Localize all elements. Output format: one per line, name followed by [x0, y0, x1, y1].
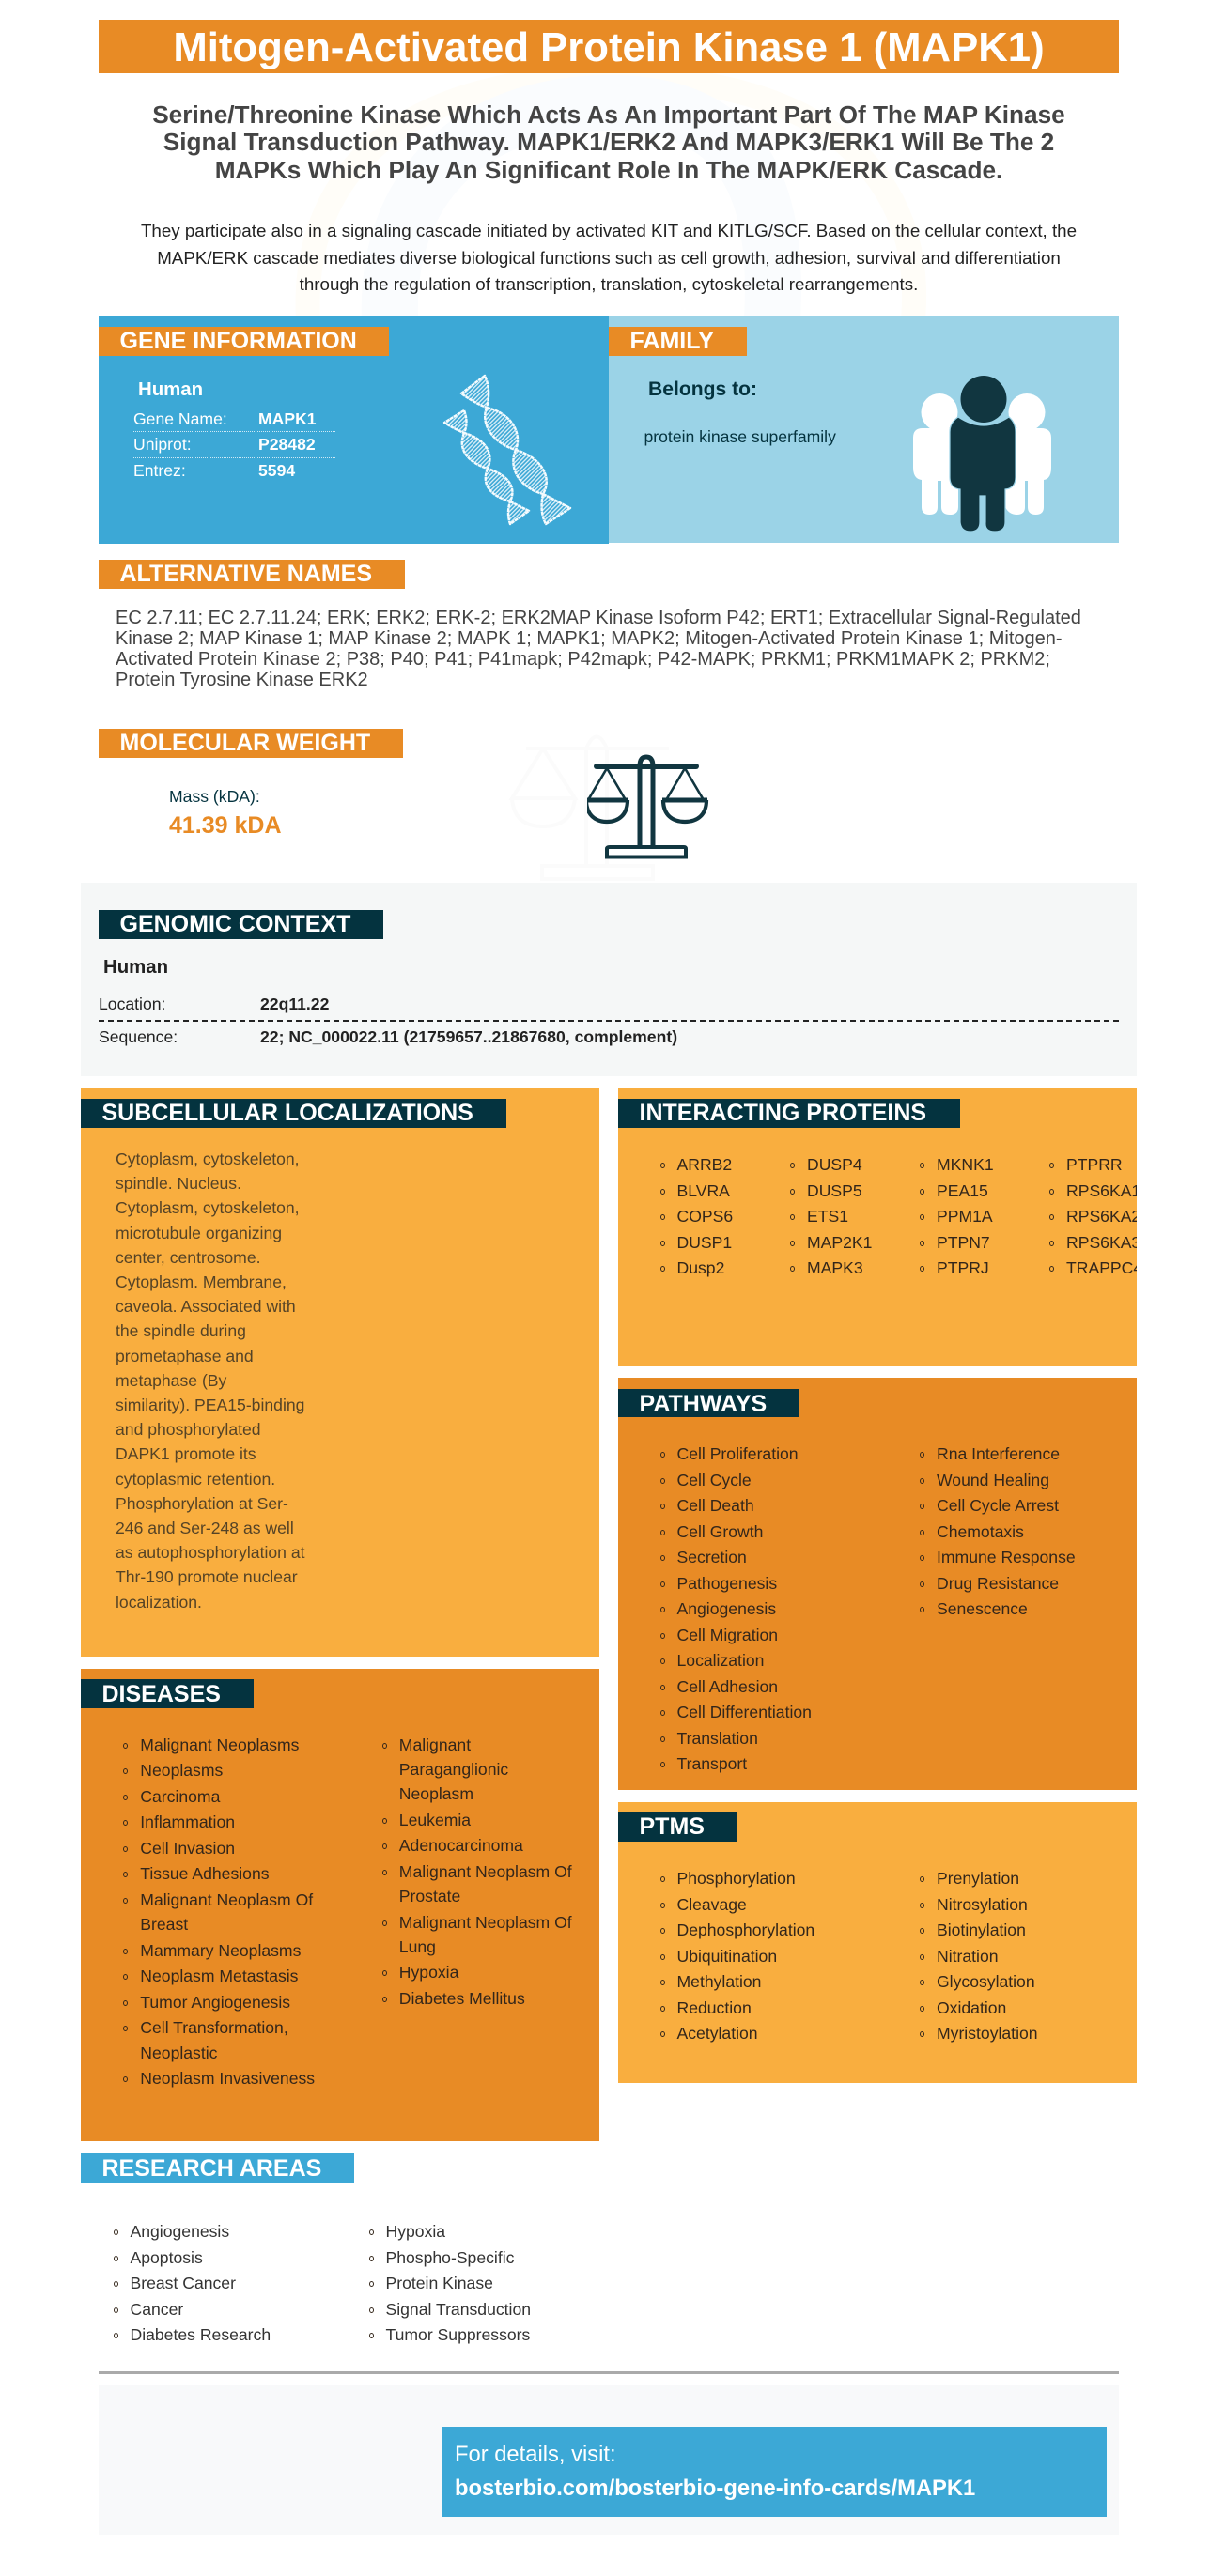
PTM list: Nitrosylation — [937, 1895, 1028, 1914]
heading: diseases: DISEASES — [101, 1681, 221, 1707]
background watermark logo — [282, 73, 939, 319]
disease list: Cell Transformation, — [140, 2018, 288, 2037]
pathway list: Cell Migration — [676, 1625, 778, 1643]
disease list: Malignant — [399, 1735, 471, 1754]
gene info table: Human — [138, 379, 203, 400]
PTM list: Acetylation — [676, 2024, 758, 2043]
protein list — [660, 1155, 1137, 1277]
research areas list: Diabetes Research — [130, 2325, 271, 2344]
pathway list: Immune Response — [937, 1548, 1076, 1566]
disease list: Lung — [399, 1937, 436, 1956]
protein list: COPS6 — [676, 1207, 733, 1226]
disease list: Cell Invasion — [140, 1839, 235, 1858]
localization text: spindle. Nucleus. — [116, 1174, 241, 1193]
subtitle: Serine/Threonine Kinase Which Acts As An Important Part Of The MAP Kinase — [152, 100, 1065, 129]
gene info table: MAPK1 — [258, 409, 317, 428]
pathway list: Cell Death — [676, 1496, 754, 1515]
PTM list: Reduction — [676, 1998, 752, 2017]
research areas list: Tumor Suppressors — [385, 2325, 530, 2344]
localization text: center, centrosome. — [116, 1248, 261, 1267]
localization text: as autophosphorylation at — [116, 1543, 304, 1562]
subtitle: MAPKs Which Play An Significant Role In The MAPK/ERK Cascade. — [215, 156, 1002, 184]
gene info table — [133, 379, 335, 480]
callout: details link: bosterbio.com/bosterbio-gene-info-cards/MAPK1 — [455, 2476, 975, 2501]
disease list: Hypoxia — [399, 1963, 458, 1982]
panel: family — [609, 316, 1119, 543]
research areas list: Cancer — [130, 2299, 183, 2318]
disease list: Inflammation — [140, 1812, 235, 1831]
heading: PTMs: PTMS — [639, 1813, 705, 1840]
protein list: BLVRA — [676, 1181, 730, 1200]
disease list: Tumor Angiogenesis — [140, 1993, 290, 2012]
PTM list: Myristoylation — [937, 2024, 1038, 2043]
panel: gene information — [99, 316, 609, 544]
protein list: ARRB2 — [676, 1155, 732, 1174]
gene info table: P28482 — [258, 435, 316, 454]
PTM list: Glycosylation — [937, 1972, 1035, 1991]
gene info table: Entrez: — [133, 461, 186, 480]
title: Mitogen-Activated Protein Kinase 1 (MAPK1) — [173, 24, 1045, 70]
intro paragraph: They participate also in a signaling cascade initiated by activated KIT and KITLG/SCF. Based on the cellular context, the — [141, 221, 1077, 240]
disease list: Neoplasm Invasiveness — [140, 2069, 315, 2088]
disease list: Mammary Neoplasms — [140, 1941, 301, 1960]
heading: diseases — [81, 1679, 254, 1708]
PTM list: Prenylation — [937, 1869, 1019, 1888]
localization text: DAPK1 promote its — [116, 1444, 256, 1463]
localization text: Phosphorylation at Ser- — [116, 1494, 288, 1513]
disease list: Malignant Neoplasm Of — [399, 1862, 572, 1881]
localization text: metaphase (By — [116, 1371, 226, 1390]
pathway list: Cell Proliferation — [676, 1444, 799, 1463]
protein list: PTPN7 — [937, 1232, 990, 1251]
alternative names text — [116, 608, 1081, 690]
species label: Human — [103, 957, 168, 978]
icon: balance scale — [587, 755, 708, 858]
research areas list: Breast Cancer — [130, 2274, 236, 2292]
pathway list: Pathogenesis — [676, 1574, 777, 1593]
heading: molecular weight: MOLECULAR WEIGHT — [120, 730, 370, 756]
pathway list: Rna Interference — [937, 1444, 1060, 1463]
belongs to label: Belongs to: — [648, 378, 757, 400]
localization text: Cytoplasm, cytoskeleton, — [116, 1149, 300, 1168]
heading: genomic context: GENOMIC CONTEXT — [120, 911, 350, 937]
mass value: 41.39 kDA — [169, 812, 282, 839]
PTM list: Ubiquitination — [676, 1946, 777, 1965]
intro paragraph — [141, 221, 1077, 294]
gene info table: 5594 — [258, 461, 295, 480]
disease list: Adenocarcinoma — [399, 1836, 523, 1855]
pathway list: Localization — [676, 1651, 764, 1670]
heading: pathways — [618, 1389, 799, 1417]
PTM list: Cleavage — [676, 1895, 747, 1914]
heading: interacting proteins: INTERACTING PROTEINS — [639, 1100, 926, 1126]
disease list: Malignant Neoplasms — [140, 1735, 299, 1754]
panel: PTMs — [618, 1802, 1137, 2083]
localization text: Cytoplasm, cytoskeleton, — [116, 1198, 300, 1217]
disease list: Carcinoma — [140, 1787, 220, 1806]
heading: family: FAMILY — [629, 328, 714, 354]
heading: pathways: PATHWAYS — [639, 1391, 767, 1417]
PTM list: Nitration — [937, 1946, 999, 1965]
research areas list: Protein Kinase — [385, 2274, 493, 2292]
callout: details link: For details, visit: — [455, 2442, 616, 2467]
localization text: localization. — [116, 1593, 202, 1612]
protein list: PPM1A — [937, 1207, 993, 1226]
disease list: Tissue Adhesions — [140, 1864, 270, 1883]
localization text: prometaphase and — [116, 1347, 254, 1365]
research areas list: Signal Transduction — [385, 2299, 531, 2318]
panel: footer — [99, 2385, 1119, 2535]
panel: diseases — [81, 1669, 599, 2141]
heading: subcellular localizations: SUBCELLULAR LOCALIZATIONS — [101, 1100, 473, 1126]
research areas list — [114, 2222, 531, 2344]
protein list: DUSP4 — [807, 1155, 862, 1174]
research areas list: Angiogenesis — [130, 2222, 229, 2241]
heading: family — [609, 327, 747, 356]
panel: interacting proteins — [618, 1088, 1137, 1366]
protein list: ETS1 — [807, 1207, 848, 1226]
heading: research areas: RESEARCH AREAS — [101, 2155, 321, 2182]
research areas list: Apoptosis — [130, 2248, 203, 2267]
location row — [99, 995, 329, 1013]
panel: pathways — [618, 1378, 1137, 1790]
research areas list: Phospho-Specific — [385, 2248, 514, 2267]
protein list: PTPRJ — [937, 1258, 989, 1277]
protein list: DUSP1 — [676, 1232, 732, 1251]
sequence row: 22; NC_000022.11 (21759657..21867680, complement) — [260, 1027, 677, 1046]
pathway list: Cell Cycle Arrest — [937, 1496, 1059, 1515]
pathway list: Drug Resistance — [937, 1574, 1059, 1593]
dashed divider — [99, 1020, 1119, 1022]
protein list: MKNK1 — [937, 1155, 994, 1174]
protein list: PEA15 — [937, 1181, 988, 1200]
heading: gene information: GENE INFORMATION — [120, 328, 357, 354]
location row: 22q11.22 — [260, 995, 329, 1013]
protein list: MAP2K1 — [807, 1232, 872, 1251]
PTM list — [660, 1869, 1038, 2043]
alternative names text: Protein Tyrosine Kinase ERK2 — [116, 670, 368, 690]
icon: DNA helix — [443, 374, 571, 526]
localization text: Thr-190 promote nuclear — [116, 1567, 298, 1586]
disease list: Malignant Neoplasm Of — [140, 1890, 313, 1909]
callout: details link — [442, 2427, 1107, 2517]
alternative names text: EC 2.7.11; EC 2.7.11.24; ERK; ERK2; ERK-2; ERK2MAP Kinase Isoform P42; ERT1; Extracellular Signal-Regulated — [116, 608, 1081, 628]
location row: Location: — [99, 995, 165, 1013]
disease list: Prostate — [399, 1887, 460, 1905]
disease list: Paraganglionic — [399, 1760, 508, 1779]
pathway list: Senescence — [937, 1599, 1028, 1618]
disease list: Neoplasms — [140, 1761, 223, 1780]
pathway list: Cell Differentiation — [676, 1703, 812, 1721]
intro paragraph: through the regulation of transcription, translation, cytoskeletal rearrangements. — [300, 274, 918, 294]
protein list: DUSP5 — [807, 1181, 862, 1200]
pathway list: Chemotaxis — [937, 1521, 1024, 1540]
disease list: Diabetes Mellitus — [399, 1989, 525, 2008]
PTM list: Biotinylation — [937, 1920, 1026, 1939]
heading: alternative names: ALTERNATIVE NAMES — [120, 561, 372, 587]
localization text: caveola. Associated with — [116, 1297, 296, 1316]
gene info table: Uniprot: — [133, 435, 192, 454]
icon: ghost scale — [507, 728, 676, 883]
subtitle — [152, 100, 1065, 184]
localization text: the spindle during — [116, 1321, 246, 1340]
pathway list: Angiogenesis — [676, 1599, 776, 1618]
PTM list: Methylation — [676, 1972, 761, 1991]
disease list: Leukemia — [399, 1811, 471, 1829]
subtitle: Signal Transduction Pathway. MAPK1/ERK2 And MAPK3/ERK1 Will Be The 2 — [163, 128, 1054, 156]
localization text: microtubule organizing — [116, 1224, 282, 1242]
PTM list: Oxidation — [937, 1998, 1006, 2017]
protein list: PTPRR — [1066, 1155, 1123, 1174]
localization text: cytoplasmic retention. — [116, 1470, 275, 1489]
PTM list: Phosphorylation — [676, 1869, 796, 1888]
sequence row: Sequence: — [99, 1027, 178, 1046]
pathway list: Cell Adhesion — [676, 1677, 778, 1696]
pathway list: Cell Growth — [676, 1521, 763, 1540]
disease list: Neoplasm — [399, 1784, 473, 1803]
pathway list: Transport — [676, 1754, 747, 1773]
intro paragraph: MAPK/ERK cascade mediates diverse biological functions such as cell growth, adhesion, survival and differentiation — [157, 248, 1061, 268]
alternative names text: Kinase 2; MAP Kinase 1; MAP Kinase 2; MAPK 1; MAPK1; MAPK2; Mitogen-Activated Protein Kinase 1; Mitogen- — [116, 628, 1063, 649]
pathway list: Wound Healing — [937, 1471, 1049, 1489]
localization text: 246 and Ser-248 as well — [116, 1519, 294, 1537]
research areas list: Hypoxia — [385, 2222, 445, 2241]
disease list: Neoplasm Metastasis — [140, 1967, 298, 1985]
protein list: Dusp2 — [676, 1258, 724, 1277]
localization text: similarity). PEA15-binding — [116, 1396, 304, 1414]
mass label: Mass (kDA): — [169, 787, 260, 806]
family name: protein kinase superfamily — [644, 427, 836, 446]
panel: subcellular localizations — [81, 1088, 599, 1657]
pathway list: Translation — [676, 1728, 758, 1747]
protein list: MAPK3 — [807, 1258, 863, 1277]
pathway list — [660, 1444, 1076, 1773]
disease list: Breast — [140, 1915, 188, 1934]
heading: PTMs — [618, 1812, 737, 1842]
localization text — [116, 1149, 304, 1612]
PTM list: Dephosphorylation — [676, 1920, 814, 1939]
pathway list: Cell Cycle — [676, 1471, 752, 1489]
pathway list: Secretion — [676, 1548, 747, 1566]
gene info table: Gene Name: — [133, 409, 227, 428]
icon: group of people — [913, 376, 1051, 532]
localization text: Cytoplasm. Membrane, — [116, 1273, 287, 1291]
panel: genomic context — [81, 883, 1137, 1076]
localization text: and phosphorylated — [116, 1420, 261, 1439]
disease list — [123, 1735, 572, 2088]
disease list: Malignant Neoplasm Of — [399, 1913, 572, 1932]
alternative names text: Activated Protein Kinase 2; P38; P40; P41; P41mapk; P42mapk; P42-MAPK; PRKM1; PRKM1MAPK 2; PRKM2; — [116, 649, 1050, 670]
disease list: Neoplastic — [140, 2044, 217, 2062]
